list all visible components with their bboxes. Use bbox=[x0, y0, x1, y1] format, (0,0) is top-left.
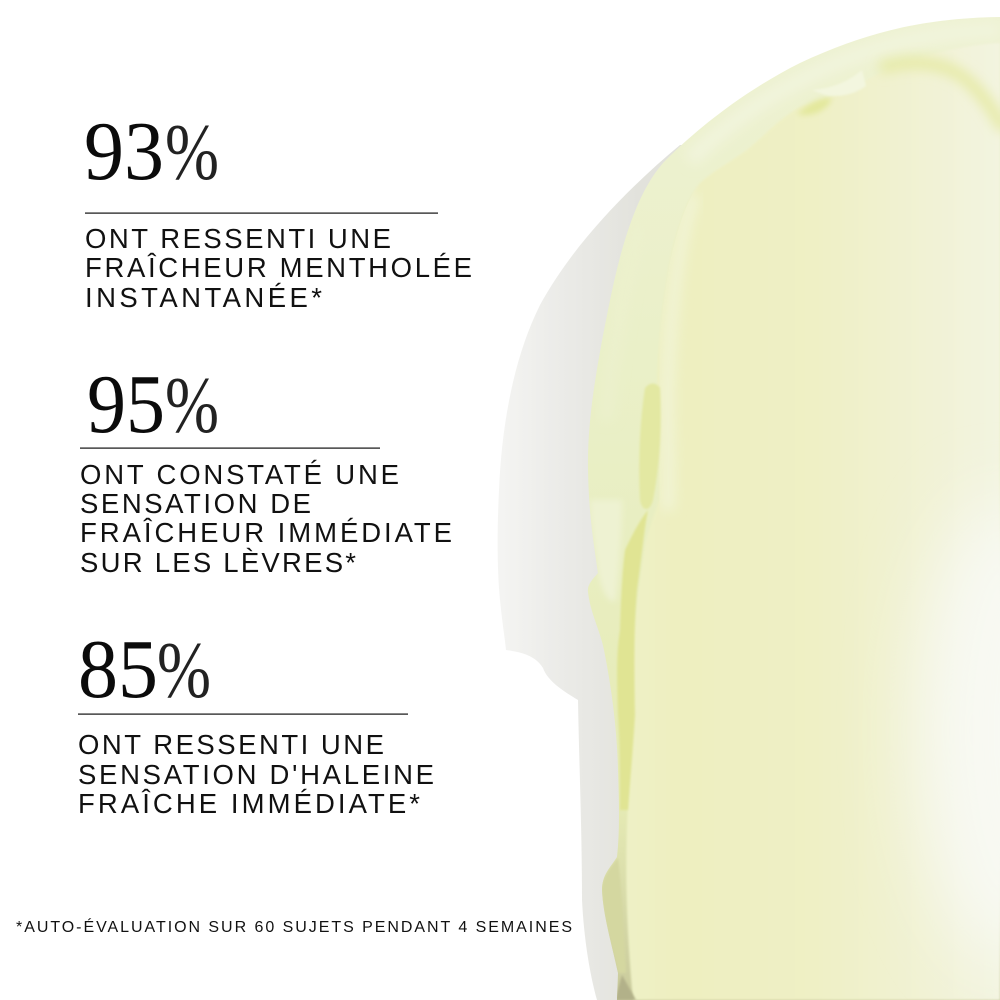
pale strip left of the fold bbox=[590, 500, 622, 601]
description 85%: SENSATION D'HALEINE bbox=[78, 759, 434, 790]
description 93%: ONT RESSENTI UNE bbox=[85, 223, 391, 254]
pale highlight on upper rim bbox=[692, 44, 900, 158]
description 85%: ONT RESSENTI UNE bbox=[78, 729, 384, 760]
surface whitening at right bbox=[668, 195, 1000, 960]
description 95% bbox=[80, 459, 452, 578]
glossy fold on rim bbox=[816, 72, 866, 96]
cast shadow of the balm bbox=[498, 145, 700, 1000]
stat block: 95% bbox=[80, 358, 452, 578]
number 93% bbox=[84, 105, 219, 198]
description 93% bbox=[85, 223, 472, 313]
number 95% bbox=[87, 358, 219, 451]
dark tip at bottom edge bbox=[617, 976, 636, 1000]
rule bbox=[78, 714, 408, 715]
number 85%: % bbox=[157, 627, 211, 715]
number 93%: % bbox=[165, 109, 219, 197]
number 85%: 85 bbox=[78, 623, 158, 716]
number 95%: % bbox=[165, 362, 219, 450]
description 95%: FRAÎCHEUR IMMÉDIATE bbox=[80, 517, 452, 548]
yellow ridge top right bbox=[880, 63, 1000, 130]
description 95%: SUR LES LÈVRES* bbox=[80, 547, 356, 578]
stat block: 85% bbox=[78, 623, 434, 819]
olive droplet at bottom bbox=[602, 860, 620, 972]
yellow dent at top rim bbox=[797, 98, 832, 115]
balm swatch bbox=[580, 10, 1000, 1000]
number 85% bbox=[78, 623, 211, 716]
main flat surface bbox=[626, 43, 1000, 1000]
rule bbox=[85, 212, 438, 214]
white sheen lower right bbox=[920, 500, 1000, 960]
number 93%: 93 bbox=[84, 105, 164, 198]
left groove bbox=[639, 384, 661, 509]
description 85%: FRAÎCHE IMMÉDIATE* bbox=[78, 788, 420, 819]
lower left yellow fold bbox=[617, 510, 648, 810]
stat block: 93% bbox=[84, 105, 472, 313]
rule bbox=[80, 448, 380, 449]
description 95%: ONT CONSTATÉ UNE bbox=[80, 459, 399, 490]
description 93%: INSTANTANÉE* bbox=[85, 282, 322, 313]
outer rim of the balm bbox=[580, 10, 1000, 1000]
footnote: *AUTO-ÉVALUATION SUR 60 SUJETS PENDANT 4 SEMAINES bbox=[16, 917, 572, 936]
number 95%: 95 bbox=[87, 358, 165, 451]
description 85% bbox=[78, 729, 434, 819]
description 95%: SENSATION DE bbox=[80, 488, 311, 519]
pale strip on left rim bbox=[606, 225, 640, 420]
pale band inside left edge bbox=[668, 195, 695, 510]
description 93%: FRAÎCHEUR MENTHOLÉE bbox=[85, 252, 472, 283]
